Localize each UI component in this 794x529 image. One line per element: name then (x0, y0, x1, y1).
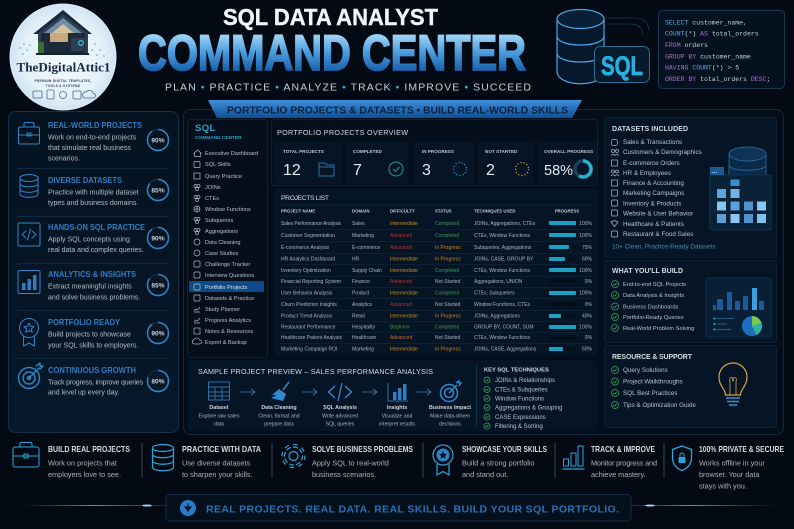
panel: sample project preview (188, 360, 597, 431)
panel: sidebar navigation: Window Functions (205, 207, 251, 213)
benefit: continuous growth: 80% (151, 378, 165, 385)
panel: resource and support: Tips & Optimization Guide (623, 402, 696, 409)
row: Product Trend Analysis (281, 314, 593, 320)
row: Financial Reporting System: Finance (352, 279, 370, 285)
panel: projects overview (272, 120, 598, 186)
card: overall progress: 58% (544, 163, 573, 179)
panel: what you'll build (604, 260, 776, 342)
panel: datasets included: Marketing Campaigns (623, 190, 684, 197)
row: Customer Segmentation: CTEs, Window Functions (474, 233, 531, 239)
panel: projects list table: PROJECTS LIST (281, 195, 329, 202)
feature: private and secure: browser. Your data (699, 470, 760, 479)
benefit: portfolio ready: your SQL skills to employers. (48, 342, 138, 350)
row: Marketing Campaign ROI: Marketing (352, 346, 374, 352)
benefit: analytics and insights: ANALYTICS & INSIGHTS (48, 270, 136, 279)
row: Product Trend Analysis: Product Trend Analysis (281, 314, 333, 320)
step: SQL analysis: Write advanced (322, 414, 358, 420)
row: Marketing Campaign ROI: In Progress (435, 346, 461, 352)
key SQL techniques list: KEY SQL TECHNIQUES (484, 368, 549, 374)
row: Restaurant Performance (281, 324, 593, 330)
panel: sidebar navigation: SQL Skills (205, 162, 231, 168)
step: dataset: Dataset (209, 405, 229, 411)
step: SQL analysis (322, 383, 358, 428)
icon: SQL database (557, 10, 650, 84)
banner: PORTFOLIO PROJECTS & DATASETS • BUILD REAL-WORLD SKILLS (227, 106, 568, 116)
row: Restaurant Performance: Beginner (390, 324, 410, 330)
panel: projects list table (275, 188, 597, 356)
row: User Behavior Analysis: Product (352, 290, 370, 296)
row: Product Trend Analysis: Retail (352, 314, 365, 320)
row: Restaurant Performance: Restaurant Performance (281, 324, 336, 330)
call-to-action bar: REAL PROJECTS. REAL DATA. REAL SKILLS. BUILD YOUR SQL PORTFOLIO. (206, 504, 619, 516)
dataset graphic (710, 147, 771, 230)
row: Churn Prediction Insights: Not Started (435, 302, 461, 308)
benefit: continuous growth (18, 363, 168, 396)
card: completed (346, 142, 409, 184)
panel: datasets included: E-commerce Orders (623, 160, 680, 167)
step: SQL analysis: SQL queries (326, 422, 355, 428)
row: E-commerce Analysis: 75% (582, 245, 593, 251)
row: Healthcare Patient Analysis: Healthcare Patient Analysis (281, 335, 342, 341)
code panel: FROM orders (665, 42, 708, 49)
panel: datasets included: HR & Employees (623, 170, 671, 177)
feature: private and secure: Works offline in your (699, 458, 765, 468)
feature: build real projects (13, 442, 130, 479)
row: HR Analytics Dashboard: JOINs, CASE, GROUP BY (474, 256, 534, 262)
feature: showcase your skills (433, 445, 547, 479)
code panel: COUNT(*) AS total_orders (665, 30, 759, 38)
panel: what you'll build: Business Dashboards (623, 304, 678, 310)
row: Churn Prediction Insights: Churn Prediction Insights (281, 302, 337, 308)
row: Inventory Optimization: CTEs, Window Functions (474, 268, 531, 274)
row: E-commerce Analysis: E-commerce (352, 245, 381, 251)
row: E-commerce Analysis: Subqueries, Aggregations (474, 245, 532, 251)
benefit: diverse datasets (20, 174, 168, 207)
feature: practice with data: PRACTICE WITH DATA (182, 445, 261, 454)
feature: showcase your skills: and stand out. (462, 470, 508, 479)
panel: projects overview: PORTFOLIO PROJECTS OVERVIEW (277, 128, 408, 137)
row: User Behavior Analysis: 100% (579, 290, 593, 296)
row: Financial Reporting System: Aggregations, UNION (474, 279, 523, 285)
title: Command Center: COMMAND CENTER (138, 25, 526, 81)
row: E-commerce Analysis: In Progress (435, 245, 461, 251)
code panel: SELECT customer_name, (665, 20, 747, 26)
logo badge: TOOLS & SYSTEMS (46, 84, 80, 88)
key SQL techniques list: JOINs & Relationships (495, 378, 555, 384)
step: insights: Insights (387, 405, 407, 411)
table header: DIFFICULTY (390, 208, 415, 214)
row: Product Trend Analysis: JOINs, Aggregations (474, 314, 520, 320)
feature: practice with data (152, 444, 261, 479)
step: business impact: Business Impact (429, 405, 471, 411)
key SQL techniques list: Aggregations & Grouping (495, 406, 562, 412)
step: business impact: decisions (439, 422, 461, 428)
logo badge: PREMIUM DIGITAL TEMPLATES, (34, 79, 92, 83)
benefit: continuous growth: CONTINUOUS GROWTH (48, 366, 136, 375)
benefit: analytics and insights: 85% (151, 282, 165, 289)
panel: sidebar navigation: Progress Analytics (205, 318, 251, 324)
panel: resource and support: SQL Best Practices (623, 390, 677, 397)
panel: what you'll build: Portfolio-Ready Queries (623, 315, 684, 321)
panel: sidebar navigation: Query Practice (205, 174, 242, 180)
row: Churn Prediction Insights: 0% (585, 302, 593, 308)
feature: build real projects: employers love to see. (48, 470, 121, 479)
panel: datasets included: Restaurant & Food Sales (623, 231, 693, 238)
panel: datasets included: Customers & Demographics (623, 149, 702, 156)
benefit: hands-on SQL practice: real data and complex queries. (48, 247, 144, 254)
row: Churn Prediction Insights (281, 302, 593, 308)
row: Customer Segmentation (281, 233, 593, 239)
key SQL techniques list (484, 368, 562, 430)
table header: TECHNIQUES USED (474, 208, 515, 214)
row: E-commerce Analysis: E-commerce Analysis (281, 245, 330, 251)
row: Financial Reporting System (281, 279, 593, 285)
benefit: hands-on SQL practice: 90% (151, 235, 165, 242)
row: User Behavior Analysis: User Behavior Analysis (281, 290, 333, 296)
panel: benefits (8, 112, 178, 432)
row: User Behavior Analysis: Completed (435, 290, 459, 296)
table header: DOMAIN (352, 208, 369, 214)
tagline: PLAN • PRACTICE • ANALYZE • TRACK • IMPROVE • SUCCEED (165, 82, 531, 94)
row: Healthcare Patient Analysis (281, 335, 593, 341)
icon: SQL database: SQL (601, 51, 643, 81)
benefit: analytics and insights: Extract meaningful insights (48, 284, 132, 290)
panel: sidebar navigation: SQL (195, 123, 216, 134)
row: User Behavior Analysis (281, 290, 593, 296)
feature: solve business problems: business scenarios. (312, 470, 376, 479)
benefit: continuous growth: and level up every day. (48, 390, 120, 396)
panel: datasets included: Inventory & Products (623, 200, 681, 208)
benefit: analytics and insights: and solve business problems. (48, 294, 140, 302)
feature: practice with data: Use diverse datasets (182, 458, 250, 468)
feature: solve business problems: Apply SQL to real-world (312, 458, 389, 468)
benefit: diverse datasets: types and business domains. (48, 200, 138, 207)
feature: build real projects: BUILD REAL PROJECTS (48, 445, 130, 454)
card: not started: NOT STARTED (485, 149, 518, 154)
row: User Behavior Analysis: Intermediate (390, 290, 418, 296)
row: Restaurant Performance: Hospitality (352, 324, 376, 330)
glow line left (20, 504, 166, 506)
row: HR Analytics Dashboard: HR Analytics Dashboard (281, 256, 335, 262)
step: data cleaning: Data Cleaning (261, 405, 297, 411)
card: total projects: TOTAL PROJECTS (283, 149, 324, 154)
card: total projects: 12 (283, 162, 301, 179)
row: Inventory Optimization: Supply Chain (352, 268, 382, 274)
feature: solve business problems: SOLVE BUSINESS PROBLEMS (312, 445, 413, 454)
row: Product Trend Analysis: Intermediate (390, 314, 418, 320)
logo badge: TheDigitalAttic1 (16, 60, 110, 74)
code panel: ORDER BY total_orders DESC; (665, 76, 770, 83)
panel: sidebar navigation: Subqueries (205, 218, 234, 224)
feature: track and improve: achieve mastery. (591, 470, 646, 479)
card: completed: 7 (353, 162, 362, 179)
feature: track and improve: TRACK & IMPROVE (591, 445, 655, 454)
panel: datasets included: Website & User Behavior (623, 210, 693, 218)
feature: track and improve (563, 445, 657, 479)
row: Customer Segmentation: Customer Segmentation (281, 233, 335, 239)
row: Churn Prediction Insights: Window Functions, CTEs (474, 302, 531, 308)
table header: PROJECT NAME (281, 208, 315, 214)
benefit: real-world projects: Work on end-to-end projects (48, 134, 137, 142)
banner (208, 100, 582, 118)
key SQL techniques list: Window Functions (495, 396, 544, 402)
panel: sidebar navigation: JOINs (205, 185, 221, 191)
panel: sidebar navigation: Case Studies (205, 251, 238, 257)
row: Financial Reporting System: Not Started (435, 279, 461, 285)
benefit: hands-on SQL practice: Apply SQL concepts using (48, 236, 130, 244)
card: not started (478, 142, 533, 184)
row: Sales Performance Analysis: Sales (352, 221, 365, 227)
panel: sidebar navigation: Data Cleaning (205, 240, 240, 246)
step: insights: interpret results (379, 422, 415, 428)
card: total projects (275, 142, 342, 184)
feature: showcase your skills: SHOWCASE YOUR SKILLS (462, 445, 547, 454)
row: Sales Performance Analysis: Intermediate (390, 221, 418, 227)
step: insights: Visualize and (382, 414, 412, 420)
benefit: portfolio ready (20, 318, 168, 350)
row: Sales Performance Analysis (281, 221, 593, 227)
panel: datasets included: 10+ Clean, Practice-Ready Datasets (612, 244, 716, 250)
panel: sidebar navigation: Interview Questions (205, 273, 254, 279)
panel: sidebar navigation (188, 120, 268, 358)
row: Restaurant Performance: Completed (435, 324, 459, 330)
row: Sales Performance Analysis: Sales Performance Analysis (281, 221, 342, 227)
card: overall progress (537, 142, 597, 184)
row: Restaurant Performance: 100% (579, 324, 593, 330)
row: HR Analytics Dashboard: In Progress (435, 256, 461, 262)
panel frame: center and right (184, 110, 784, 434)
feature: showcase your skills: Build a strong portfolio (462, 458, 535, 468)
row: Healthcare Patient Analysis: Not Started (435, 335, 461, 341)
panel: resource and support: Query Solutions (623, 367, 668, 374)
row: Churn Prediction Insights: Advanced (390, 302, 412, 308)
key SQL techniques list: CASE Expressions (495, 415, 546, 421)
row: Customer Segmentation: 100% (579, 233, 593, 239)
step: SQL analysis: SQL Analysis (323, 405, 357, 411)
table header (281, 208, 579, 214)
row: Healthcare Patient Analysis: Healthcare (352, 335, 376, 341)
panel: datasets included: Healthcare & Patients (623, 221, 684, 228)
row: Sales Performance Analysis: 100% (579, 221, 593, 227)
panel: what you'll build: Real-World Problem Solving (623, 326, 694, 332)
row: User Behavior Analysis: CTEs, Subqueries (474, 290, 515, 296)
row: Inventory Optimization: Inventory Optimization (281, 268, 331, 274)
row: Inventory Optimization (281, 268, 593, 274)
benefit: real-world projects: 90% (151, 137, 165, 144)
arrow 2 (302, 389, 317, 395)
step: data cleaning (258, 382, 300, 428)
feature: solve business problems (282, 444, 413, 479)
panel: sidebar navigation: CTEs (205, 196, 219, 202)
card: not started: 2 (486, 162, 495, 179)
code panel (658, 10, 784, 88)
arrow 4 (416, 389, 431, 395)
logo badge (10, 4, 116, 110)
panel: sidebar navigation: Challenge Tracker (205, 262, 251, 268)
row: Marketing Campaign ROI: 50% (582, 346, 593, 352)
key SQL techniques list: CTEs & Subqueries (495, 388, 548, 394)
benefit: diverse datasets: Practice with multiple dataset (48, 190, 139, 196)
feature: build real projects: Work on projects that (48, 458, 117, 468)
panel: sample project preview: SAMPLE PROJECT PREVIEW – SALES PERFORMANCE ANALYSIS (198, 367, 433, 376)
panel: resource and support: Project Walkthroughs (623, 378, 683, 386)
benefit: diverse datasets: 85% (151, 187, 165, 194)
table header: STATUS (435, 208, 452, 214)
dashboard graphic (706, 278, 771, 337)
panel: sidebar navigation: Export & Backup (205, 340, 247, 346)
row: E-commerce Analysis: Advanced (390, 245, 412, 251)
card: overall progress: OVERALL PROGRESS (544, 149, 593, 154)
benefit: hands-on SQL practice: HANDS-ON SQL PRACTICE (48, 223, 145, 232)
row: Healthcare Patient Analysis: CTEs, Window Functions (474, 335, 531, 341)
step: data cleaning: Clean, format and (258, 414, 300, 420)
step: dataset (199, 382, 240, 428)
row: Healthcare Patient Analysis: 0% (585, 335, 593, 341)
row: Customer Segmentation: Completed (435, 233, 459, 239)
row: Marketing Campaign ROI: Marketing Campaign ROI (281, 346, 337, 352)
step: business impact (429, 381, 471, 428)
step: dataset: data (214, 422, 224, 428)
arrow 1 (240, 389, 255, 395)
call-to-action bar (166, 494, 631, 521)
row: Marketing Campaign ROI: JOINs, CASE, Aggregations (474, 346, 537, 352)
panel: datasets included: Finance & Accounting (623, 180, 684, 187)
arrow 3 (362, 389, 377, 395)
panel: sidebar navigation: Executive Dashboard (205, 151, 258, 157)
panel: sidebar navigation: COMMAND CENTER (195, 135, 242, 141)
benefit: continuous growth: Track progress, improve queries (48, 380, 144, 386)
row: Restaurant Performance: GROUP BY, COUNT, SUM (474, 324, 534, 330)
benefit: portfolio ready: 90% (151, 330, 165, 337)
title: SQL Data Analyst: SQL DATA ANALYST (223, 4, 439, 30)
row: HR Analytics Dashboard (281, 256, 593, 262)
panel: what you'll build: WHAT YOU'LL BUILD (612, 268, 683, 275)
dataset graphic: ... (712, 169, 717, 175)
benefit: hands-on SQL practice (18, 223, 168, 254)
step: data cleaning: prepare data (264, 422, 294, 428)
row: Customer Segmentation: Advanced (390, 233, 412, 239)
card: in progress: 3 (422, 162, 431, 179)
code panel: HAVING COUNT(*) > 5 (665, 64, 739, 72)
row: HR Analytics Dashboard: HR (352, 256, 360, 262)
card: in progress (414, 142, 474, 184)
panel: what you'll build: End-to-end SQL Projects (623, 282, 686, 288)
panel: sidebar navigation: Datasets & Practice (205, 296, 254, 302)
benefit: real-world projects: REAL-WORLD PROJECTS (48, 121, 142, 130)
row: Sales Performance Analysis: JOINs, Aggregations, CTEs (474, 221, 536, 227)
feature: private and secure: stays with you. (699, 482, 747, 490)
panel: what you'll build: Data Analysis & Insights (623, 293, 684, 299)
benefit: analytics and insights (18, 270, 168, 302)
step: insights (379, 383, 415, 428)
row: Healthcare Patient Analysis: Advanced (390, 335, 412, 341)
card: completed: COMPLETED (353, 149, 383, 154)
benefit: portfolio ready: Build projects to showcase (48, 332, 131, 338)
row: Financial Reporting System: 0% (585, 279, 593, 285)
panel: resource and support (604, 346, 776, 428)
row: Churn Prediction Insights: Analytics (352, 302, 373, 308)
panel: sidebar navigation: Study Planner (205, 307, 240, 313)
glow line right (631, 504, 781, 506)
row: Marketing Campaign ROI (281, 346, 593, 352)
row: Product Trend Analysis: In Progress (435, 314, 461, 320)
benefit: real-world projects: scenarios. (48, 156, 80, 162)
benefit: real-world projects: that simulate real business (48, 145, 131, 152)
panel: datasets included (604, 118, 776, 258)
row: Financial Reporting System: Advanced (390, 279, 412, 285)
code panel: GROUP BY customer_name (665, 54, 751, 60)
row: HR Analytics Dashboard: 60% (582, 256, 593, 262)
icon: light bulb (719, 363, 747, 405)
feature: private and secure (672, 445, 784, 490)
panel: sidebar navigation: Aggregations (205, 229, 238, 235)
panel: sidebar navigation: Notes & Resources (205, 329, 253, 335)
row: E-commerce Analysis (281, 245, 593, 251)
benefit: real-world projects (18, 121, 168, 162)
row: Customer Segmentation: Marketing (352, 233, 374, 239)
row: Product Trend Analysis: 40% (582, 314, 593, 320)
panel: resource and support: RESOURCE & SUPPORT (612, 354, 693, 361)
key SQL techniques list: Filtering & Sorting (495, 424, 543, 430)
row: Sales Performance Analysis: Completed (435, 221, 459, 227)
row: Marketing Campaign ROI: Intermediate (390, 346, 418, 352)
row: Inventory Optimization: Completed (435, 268, 459, 274)
step: business impact: Make data-driven (430, 414, 470, 420)
panel: datasets included: Sales & Transactions (623, 139, 682, 146)
step: dataset: Explore raw sales (199, 414, 240, 420)
panel: sidebar navigation: Portfolio Projects (205, 285, 247, 291)
row: HR Analytics Dashboard: Intermediate (390, 256, 418, 262)
panel: datasets included: DATASETS INCLUDED (612, 126, 688, 133)
card: in progress: IN PROGRESS (422, 149, 454, 154)
table header: PROGRESS (555, 208, 579, 214)
feature: track and improve: Monitor progress and (591, 458, 657, 468)
row: Inventory Optimization: Intermediate (390, 268, 418, 274)
benefit: diverse datasets: DIVERSE DATASETS (48, 176, 122, 185)
row: Inventory Optimization: 100% (579, 268, 593, 274)
feature: practice with data: to sharpen your skills. (182, 470, 253, 479)
row: Financial Reporting System: Financial Reporting System (281, 279, 341, 285)
benefit: portfolio ready: PORTFOLIO READY (48, 318, 120, 327)
